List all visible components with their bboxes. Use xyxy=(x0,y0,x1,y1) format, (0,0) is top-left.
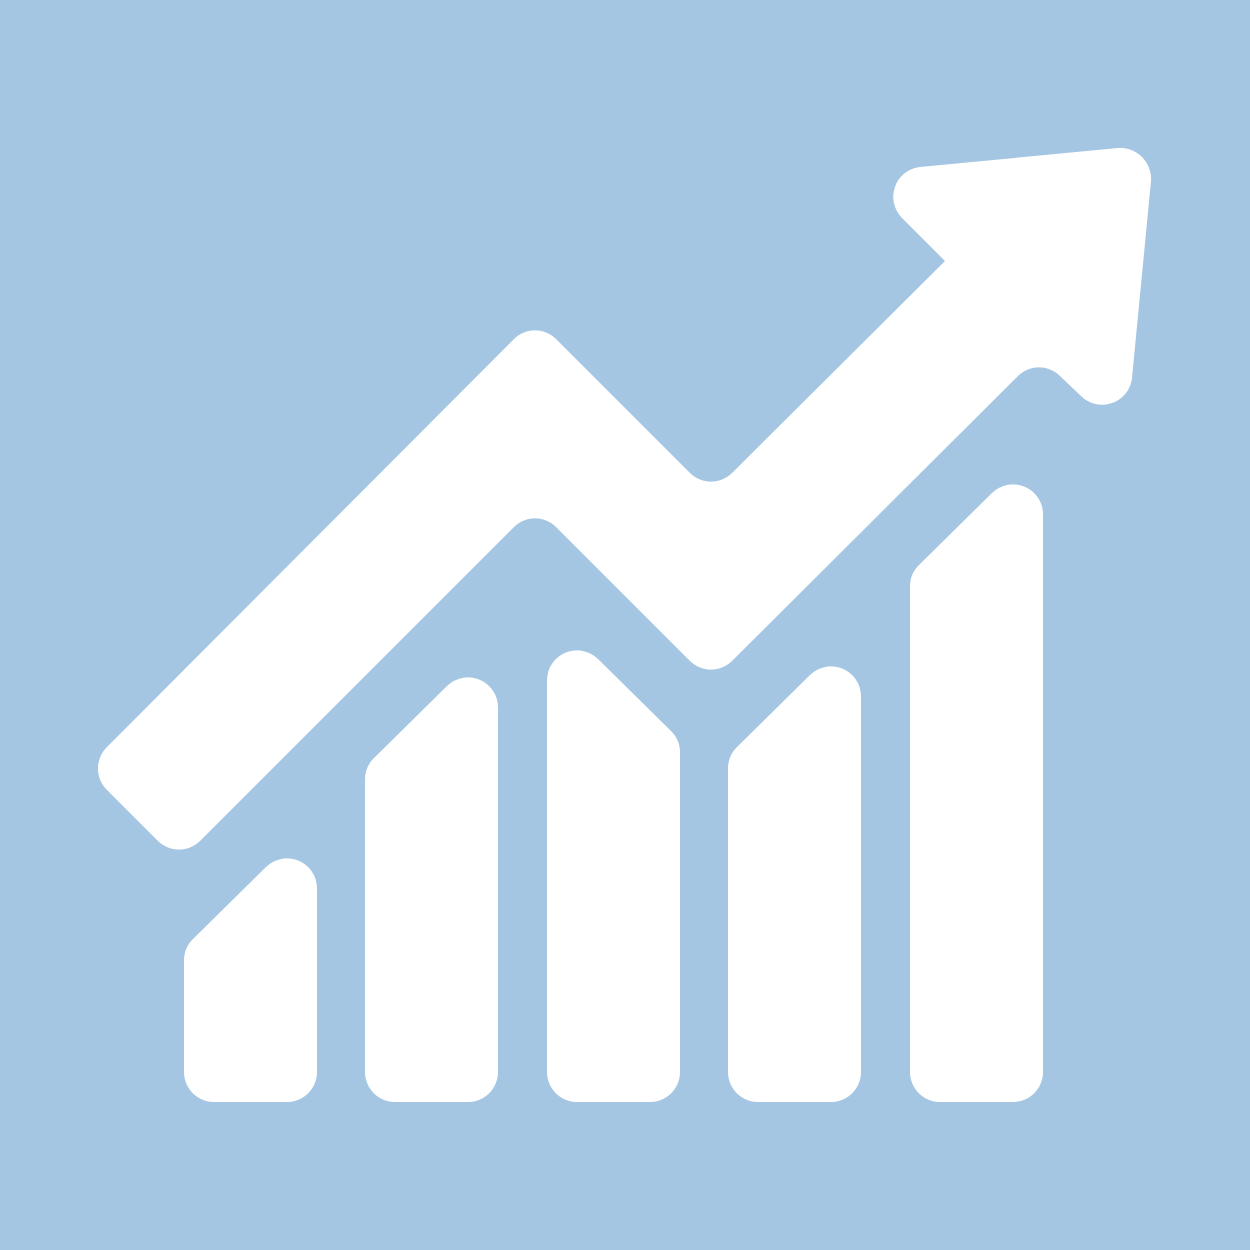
bar 1 xyxy=(184,858,317,1102)
bar 3 xyxy=(547,650,680,1102)
arrow: rising trend line xyxy=(98,148,1151,850)
bar chart: five rising bars xyxy=(184,484,1043,1102)
bar 5 xyxy=(910,484,1043,1102)
bar 2 xyxy=(365,677,498,1102)
bar 4 xyxy=(728,666,861,1102)
